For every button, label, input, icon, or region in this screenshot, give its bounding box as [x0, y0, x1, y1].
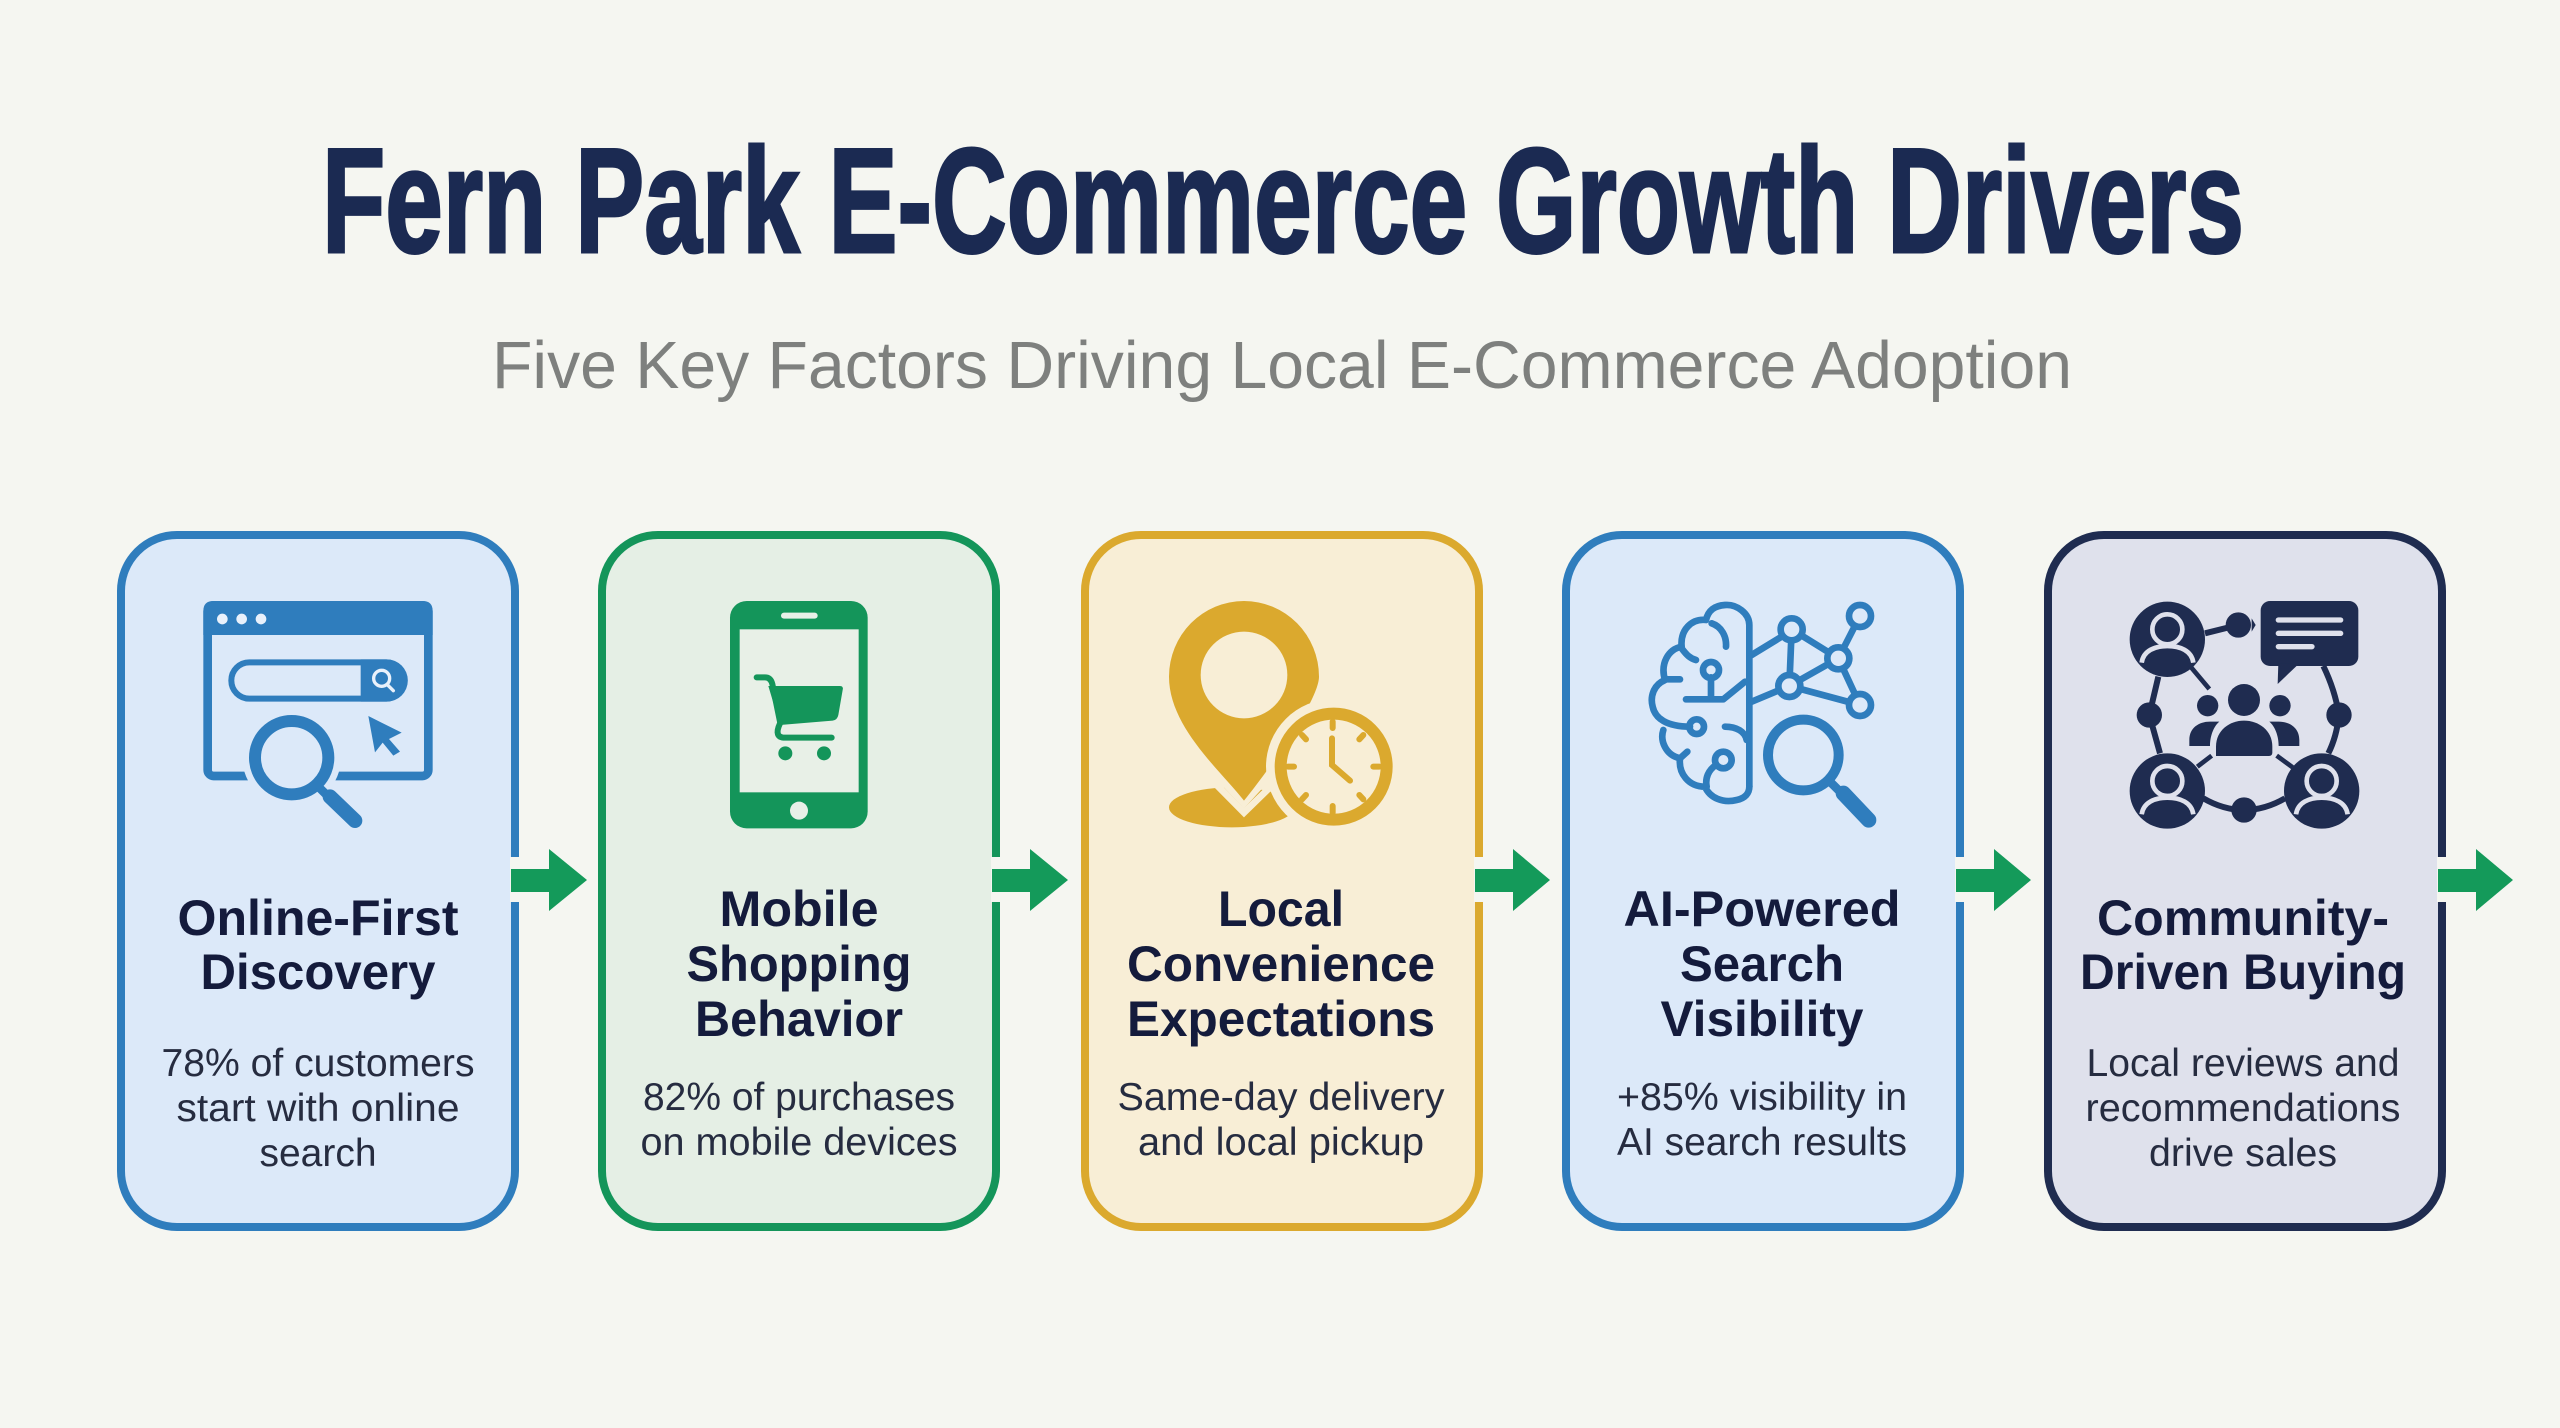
heading: Behavior — [695, 991, 903, 1047]
heading: Expectations — [1127, 991, 1435, 1047]
heading: Convenience — [1127, 936, 1435, 992]
heading: Search — [1680, 936, 1844, 992]
icon: phone with cart — [730, 601, 868, 828]
card background — [1085, 535, 1479, 1227]
body text: +85% visibility in — [1617, 1076, 1907, 1119]
card background — [602, 535, 996, 1227]
subtitle: Five Key Factors Driving Local E-Commerce Adoption — [492, 328, 2072, 403]
card background — [2048, 535, 2442, 1227]
body text: on mobile devices — [640, 1121, 958, 1164]
heading: Mobile — [720, 881, 878, 937]
panel: Mobile Shopping Behavior — [602, 535, 996, 1227]
heading: Driven Buying — [2080, 944, 2406, 1000]
body text — [162, 1042, 474, 1175]
arrow 1 — [510, 849, 587, 911]
heading: Community- — [2097, 890, 2389, 946]
body text: 78% of customers — [162, 1042, 474, 1085]
heading — [1624, 881, 1900, 1047]
panel: Local Convenience Expectations — [1085, 535, 1479, 1227]
card background — [121, 535, 515, 1227]
heading: Discovery — [200, 944, 436, 1000]
heading: AI-Powered — [1624, 881, 1900, 937]
body text: search — [260, 1132, 376, 1175]
body text: Local reviews and — [2086, 1042, 2400, 1085]
arrow 5 — [2437, 849, 2513, 911]
icon: brain network with magnifier — [1652, 605, 1871, 820]
panel: AI-Powered Search Visibility — [1566, 535, 1960, 1227]
body text — [640, 1076, 958, 1164]
body text — [2086, 1042, 2400, 1175]
body text: 82% of purchases — [643, 1076, 955, 1119]
body text: recommendations — [2086, 1087, 2400, 1130]
icon: community network — [2130, 601, 2359, 829]
icon: browser search — [203, 601, 433, 821]
heading — [1127, 881, 1435, 1047]
card background — [1566, 535, 1960, 1227]
body text: AI search results — [1617, 1121, 1907, 1164]
arrow 3 — [1474, 849, 1550, 911]
icon: map pin with clock — [1169, 601, 1401, 834]
arrow 4 — [1955, 849, 2031, 911]
heading: Shopping — [686, 936, 912, 992]
heading — [178, 890, 459, 1000]
panel: Online-First Discovery — [121, 535, 515, 1227]
heading — [686, 881, 912, 1047]
body text: and local pickup — [1138, 1121, 1424, 1164]
arrow 2 — [991, 849, 1068, 911]
body text — [1118, 1076, 1445, 1164]
heading: Online-First — [178, 890, 459, 946]
body text: drive sales — [2149, 1132, 2337, 1175]
heading — [2080, 890, 2406, 1000]
panel: Community-Driven Buying — [2048, 535, 2442, 1227]
heading: Visibility — [1660, 991, 1864, 1047]
body text — [1617, 1076, 1907, 1164]
body text: start with online — [176, 1087, 460, 1130]
heading: Local — [1218, 881, 1344, 937]
body text: Same-day delivery — [1118, 1076, 1445, 1119]
